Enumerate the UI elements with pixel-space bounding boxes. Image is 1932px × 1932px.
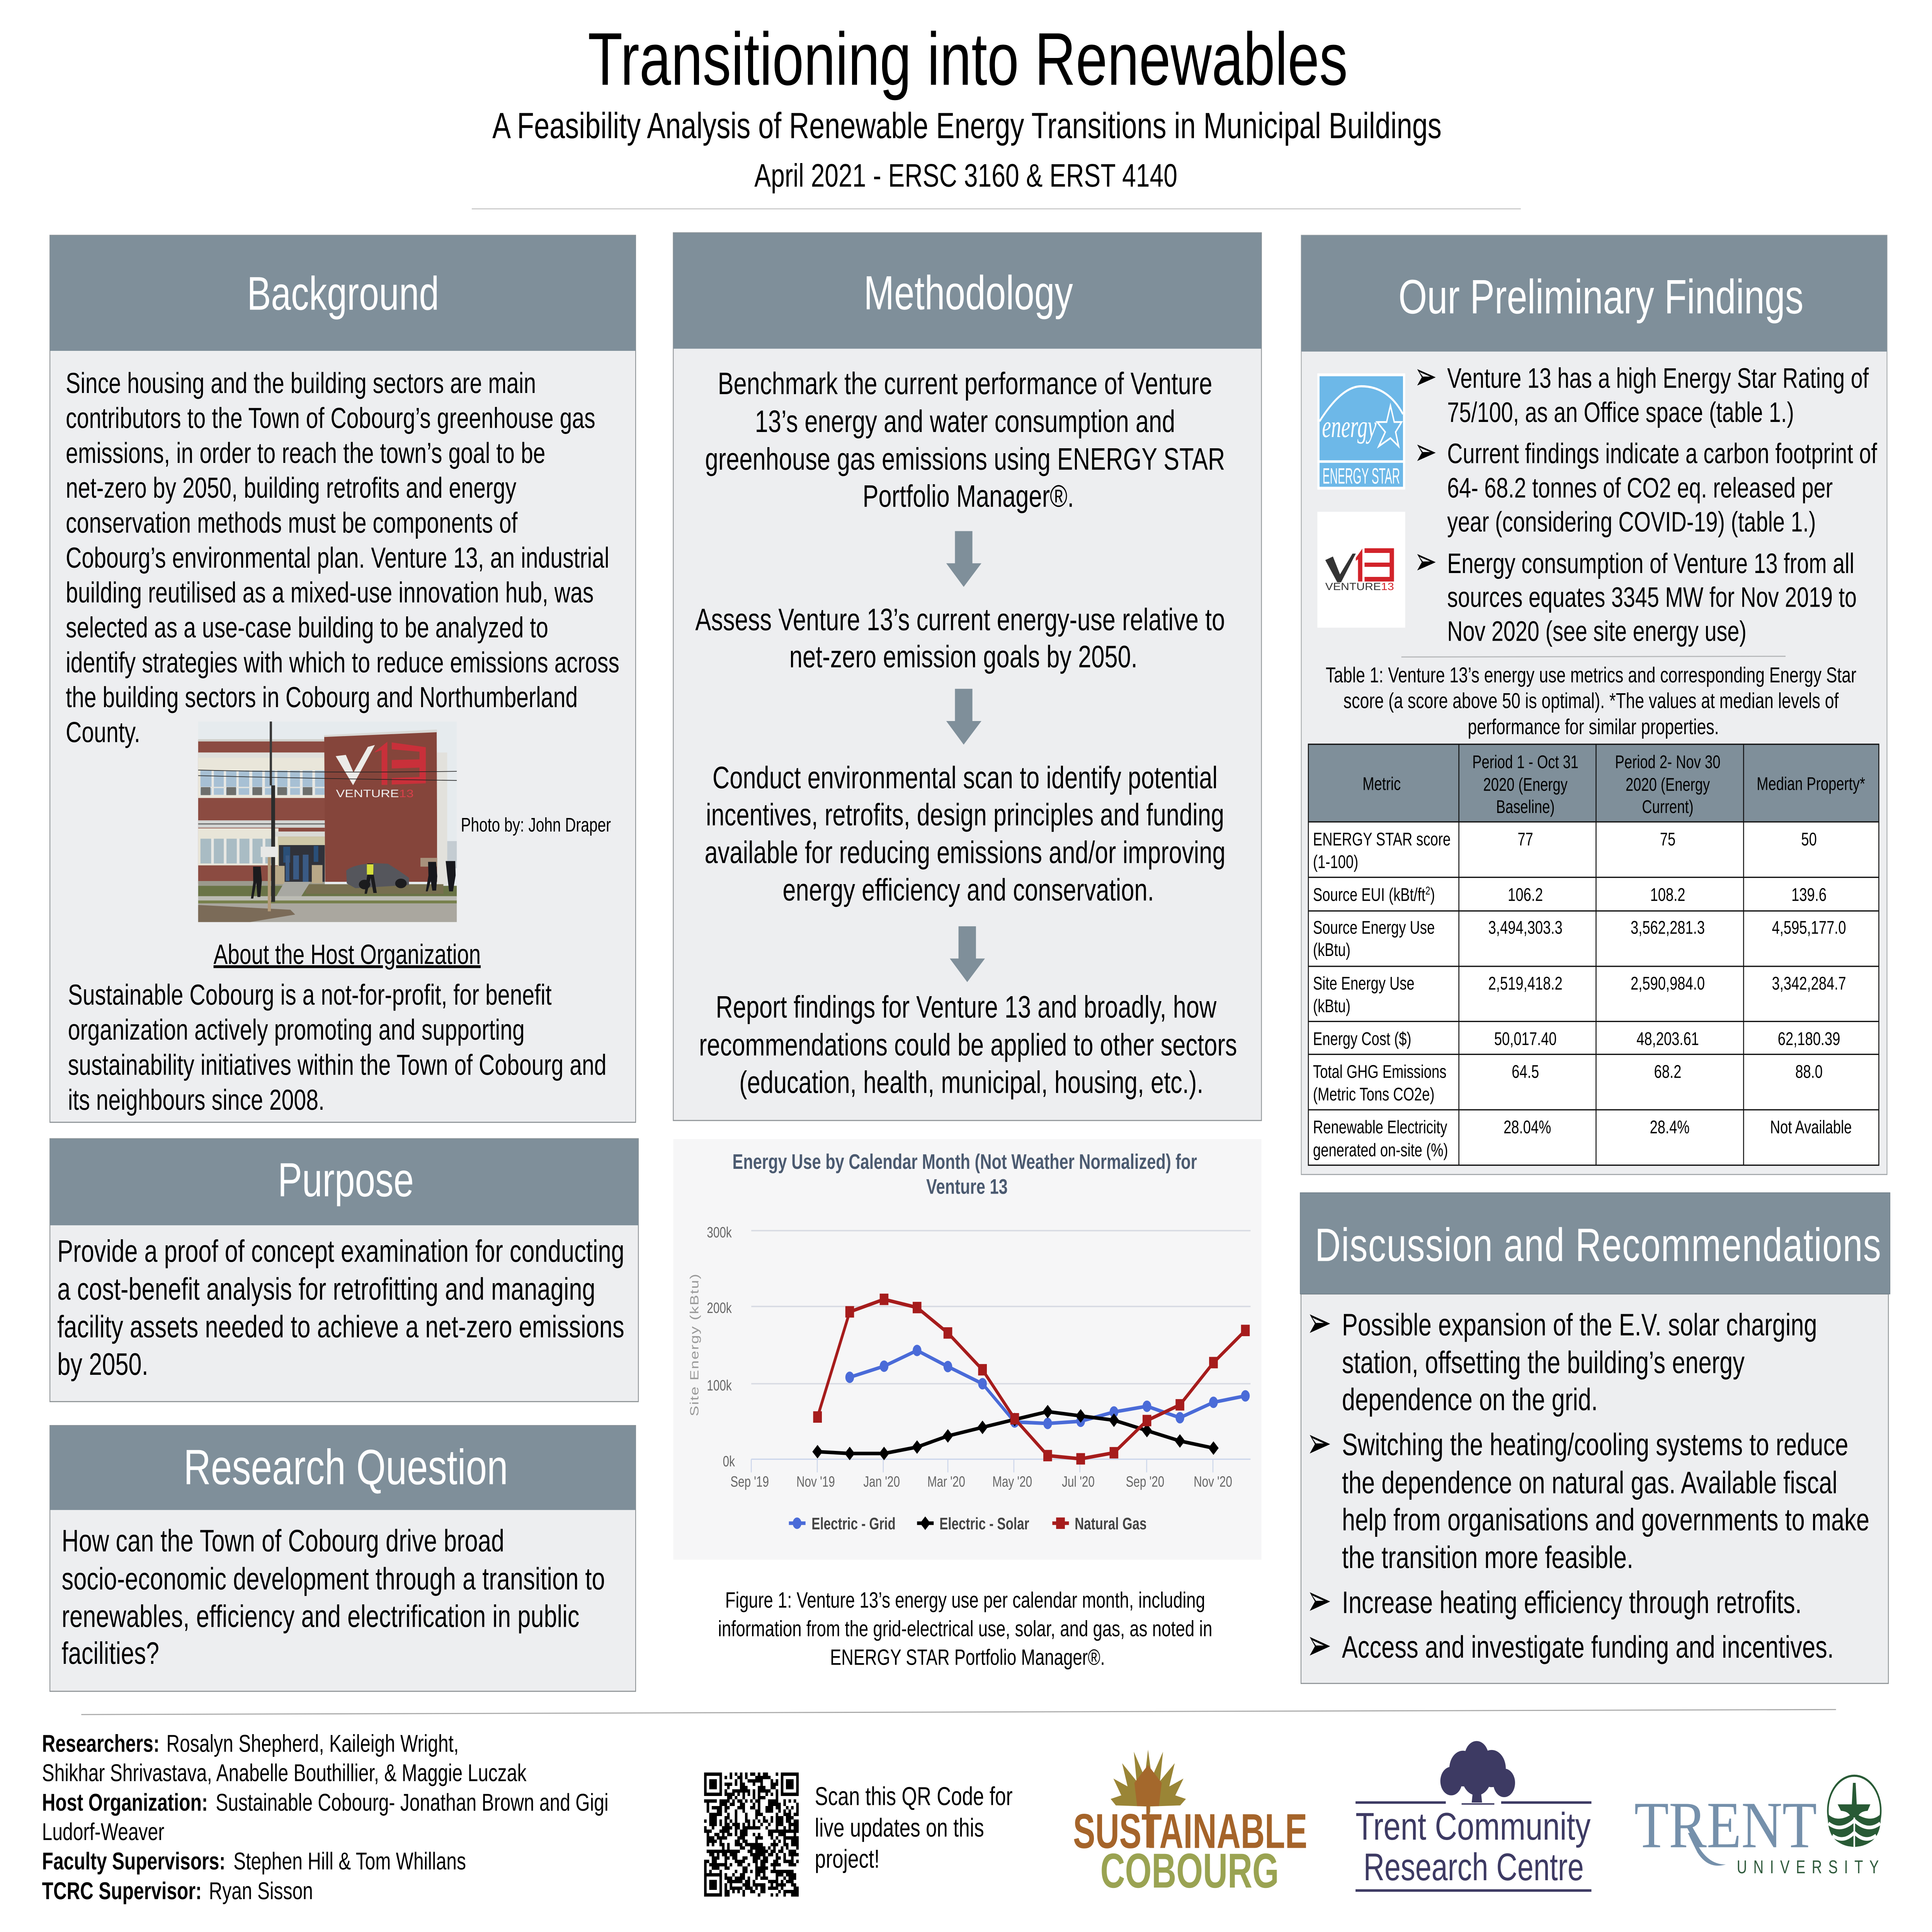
icon: bullet arrow 2 [1417,444,1436,461]
recommendation 1: Possible expansion of the E.V. solar charging [1342,1308,1817,1342]
arrow: step 3 to 4 [950,926,985,982]
chart legend: Electric - Grid [811,1514,896,1533]
recommendation 4: Access and investigate funding and incentives. [1342,1630,1834,1665]
host organization text: Sustainable Cobourg is a not-for-profit, for benefit [68,979,552,1011]
y axis title: Site Energy (kBtu) [688,1274,701,1416]
panel: our preliminary findings [1301,235,1887,1175]
table column: period 1: 2,519,418.2 [1488,973,1563,993]
R tail [1688,1833,1726,1866]
step 2 text: net-zero emission goals by 2050. [789,639,1138,674]
icon: bullet arrow [1310,1592,1330,1611]
background text: County. [66,716,140,748]
figure caption: ENERGY STAR Portfolio Manager®. [830,1645,1105,1670]
figure caption: Figure 1: Venture 13’s energy use per calendar month, including [725,1588,1205,1612]
icon: bullet arrow 1 [1417,369,1436,386]
background text: net-zero by 2050, building retrofits and energy [66,472,517,504]
table metric names: ENERGY STAR score [1313,829,1451,849]
QR call to action: Scan this QR Code for [815,1782,1013,1811]
logo: Trent Community Research Centre [1355,1741,1592,1891]
background text: Cobourg’s environmental plan. Venture 13, an industrial [66,542,609,574]
finding 1: Venture 13 has a high Energy Star Rating of [1447,362,1869,394]
recommendation 2: Switching the heating/cooling systems to reduce [1342,1427,1848,1462]
chart legend [789,1514,1146,1533]
step 3 text: incentives, retrofits, design principles and funding [706,798,1224,832]
step 4 text: recommendations could be applied to other sectors [699,1027,1237,1062]
footer: credits: Ryan Sisson [209,1877,313,1905]
icon: bullet arrow [1310,1637,1330,1656]
table header row: Period 2- Nov 30 [1615,752,1720,772]
finding 2: Current findings indicate a carbon footprint of [1447,437,1878,469]
QR call to action: live updates on this [815,1813,984,1842]
step 3 text: energy efficiency and conservation. [782,872,1154,907]
host organization text: its neighbours since 2008. [68,1084,325,1116]
footer: credits: Rosalyn Shepherd, Kaileigh Wright, [166,1730,459,1757]
icon: venture 13 logo [1317,512,1405,628]
footer: credits: Sustainable Cobourg- Jonathan Brown and Gigi [216,1789,609,1816]
x axis labels: Nov '19 [796,1473,835,1490]
footer: credits: Ludorf-Weaver [42,1818,164,1845]
footer: credits: Host Organization: [42,1789,208,1816]
step 3 text: Conduct environmental scan to identify potential [713,760,1218,795]
footer: credits: Shikhar Shrivastava, Anabelle Bouthillier, & Maggie Luczak [42,1759,527,1786]
icon: energy star logo: ENERGY STAR [1323,464,1400,488]
table column: median property: Not Available [1770,1117,1852,1137]
logo: Trent University [1634,1776,1881,1878]
photo credit: Photo by: John Draper [461,814,611,836]
table column: period 1: 3,494,303.3 [1488,917,1563,938]
icon: bullet arrow 3 [1417,554,1436,570]
series: electric grid [850,1350,1245,1423]
heading: findings: Our Preliminary Findings [1398,270,1803,324]
table metric names: Source EUI (kBt/ft [1313,884,1425,905]
subtitle: A Feasibility Analysis of Renewable Energy Transitions in Municipal Buildings [492,105,1442,146]
heading: methodology: Methodology [864,267,1073,320]
QR code [704,1772,799,1896]
logo: Trent Community Research Centre: Research Centre [1364,1845,1584,1888]
table column: period 1: 106.2 [1508,884,1543,905]
step 2 text: Assess Venture 13’s current energy-use relative to [695,602,1225,637]
recommendation 2: help from organisations and governments to make [1342,1502,1869,1537]
table metric names: generated on-site (%) [1313,1139,1448,1160]
x axis labels: Mar '20 [927,1473,965,1490]
purpose text: a cost-benefit analysis for retrofitting and managing [57,1272,595,1306]
table header row: Baseline) [1496,796,1554,817]
logo: Sustainable Cobourg [1073,1750,1307,1898]
finding 3: sources equates 3345 MW for Nov 2019 to [1447,581,1857,613]
table header row: Period 1 - Oct 31 [1472,752,1578,772]
table column: period 1: 64.5 [1512,1061,1539,1082]
emblem [1828,1776,1881,1847]
x axis labels: Sep '20 [1126,1473,1164,1490]
x axis labels: Sep '19 [730,1473,769,1490]
panel: purpose [50,1139,638,1401]
y axis labels: 0k [723,1453,735,1469]
y axis labels: 200k [707,1299,732,1316]
background text: Since housing and the building sectors are main [66,367,536,400]
leaf emblem [1111,1750,1186,1813]
finding 2: 64- 68.2 tonnes of CO2 eq. released per [1447,472,1833,503]
table header row: 2020 (Energy [1626,774,1710,795]
panel: background [50,235,636,1122]
recommendation 2: the dependence on natural gas. Available fiscal [1342,1465,1837,1500]
footer: credits: Researchers: [42,1730,160,1757]
chart legend: Electric - Solar [939,1514,1029,1533]
recommendation 2: the transition more feasible. [1342,1540,1633,1575]
table column: period 2: 48,203.61 [1636,1028,1699,1049]
table column: period 2: 68.2 [1654,1061,1681,1082]
heading: purpose: Purpose [278,1153,414,1207]
footer: credits: Faculty Supervisors: [42,1848,225,1875]
table column: median property: 62,180.39 [1778,1028,1840,1049]
x axis labels: Nov '20 [1194,1473,1232,1490]
table metric names: Site Energy Use [1313,973,1415,993]
y axis labels: 100k [707,1377,732,1394]
x axis labels: Jan '20 [863,1473,900,1490]
tree [1440,1741,1515,1804]
table column: median property: 3,342,284.7 [1772,973,1846,993]
step 1 text: greenhouse gas emissions using ENERGY STAR [705,442,1225,476]
panel: research question [50,1425,636,1691]
recommendation 3: Increase heating efficiency through retrofits. [1342,1585,1802,1620]
recommendation 1: dependence on the grid. [1342,1382,1598,1417]
table caption: Table 1: Venture 13’s energy use metrics and corresponding Energy Star [1326,663,1856,687]
background text: emissions, in order to reach the town’s goal to be [66,437,545,469]
table metric names: ) [1430,884,1435,905]
step 3 text: available for reducing emissions and/or improving [704,835,1225,870]
research question text: renewables, efficiency and electrification in public [61,1599,580,1634]
table metric names: (kBtu) [1313,939,1350,960]
recommendation 1: station, offsetting the building’s energy [1342,1345,1745,1380]
wordmark: university: UNIVERSITY [1737,1857,1879,1878]
subheading: about the host organization: About the Host Organization [214,939,481,970]
background text: selected as a use-case building to be analyzed to [66,612,548,644]
table header row: Metric [1362,773,1401,794]
step 1 text: Benchmark the current performance of Venture [718,366,1212,401]
background text: identify strategies with which to reduce emissions across [66,646,619,679]
table column: period 2: 3,562,281.3 [1631,917,1705,938]
table metric names: Renewable Electricity [1313,1117,1447,1137]
background text: the building sectors in Cobourg and Northumberland [66,682,578,714]
step 4 text: Report findings for Venture 13 and broadly, how [716,990,1217,1024]
series: natural gas [813,1294,1250,1464]
footer: credits: TCRC Supervisor: [42,1877,202,1905]
icon: energy star logo: energy [1322,410,1377,444]
research question text: socio-economic development through a transition to [61,1561,605,1596]
step 4 text: (education, health, municipal, housing, etc.). [739,1065,1203,1100]
heading: background: Background [247,267,439,320]
purpose text: by 2050. [57,1347,148,1382]
title: Transitioning into Renewables [588,17,1348,101]
table header row: Median Property* [1757,773,1865,794]
research question text: facilities? [61,1636,159,1670]
icon: energy star logo [1317,373,1405,490]
wordmark: sustainable: SUSTAINABLE [1073,1804,1307,1859]
icon: bullet arrow [1310,1435,1330,1454]
series: electric solar [812,1405,1219,1460]
host organization text: sustainability initiatives within the Town of Cobourg and [68,1049,607,1081]
host organization text: organization actively promoting and supporting [68,1014,525,1046]
step 1 text: Portfolio Manager®. [863,479,1074,514]
wordmark: Trent Community [1355,1804,1590,1848]
arrow: step 1 to 2 [946,531,981,587]
table caption: score (a score above 50 is optimal). *The values at median levels of [1344,689,1838,713]
table header row: Current) [1642,796,1694,817]
table metric names: (Metric Tons CO2e) [1313,1084,1434,1104]
table column: median property: 88.0 [1795,1061,1823,1082]
finding 3: Nov 2020 (see site energy use) [1447,615,1747,647]
table column: period 1: 50,017.40 [1494,1028,1557,1049]
table column: period 1: 77 [1517,829,1533,849]
chart title: Venture 13 [926,1175,1008,1199]
table metric names: (kBtu) [1313,995,1350,1016]
table column: period 2: 28.4% [1650,1117,1690,1137]
purpose text: Provide a proof of concept examination for conducting [57,1234,624,1269]
figure caption: information from the grid-electrical use, solar, and gas, as noted in [718,1617,1212,1641]
x axis labels: Jul '20 [1062,1473,1095,1490]
icon: bullet arrow [1310,1315,1330,1333]
date and course line: April 2021 - ERSC 3160 & ERST 4140 [754,158,1177,194]
photo sign wordmark: VENTURE 13 [336,788,414,800]
finding 2: year (considering COVID-19) (table 1.) [1447,506,1816,537]
purpose text: facility assets needed to achieve a net-zero emissions [57,1310,624,1344]
wordmark: cobourg: COBOURG [1100,1844,1279,1898]
y axis labels: 300k [707,1224,732,1241]
panel: methodology [673,233,1262,1121]
table column: median property: 4,595,177.0 [1772,917,1846,938]
footer: credits: Stephen Hill & Tom Whillans [233,1848,466,1875]
table metric names: Source Energy Use [1313,917,1435,938]
table column: period 2: 75 [1660,829,1675,849]
table caption: performance for similar properties. [1468,714,1719,739]
photo: Venture 13 building [198,721,457,922]
chart title: Energy Use by Calendar Month (Not Weather Normalized) for [733,1150,1197,1173]
table 1: energy metrics [1308,744,1879,1165]
arrow: step 2 to 3 [946,689,981,745]
panel: energy use line chart [673,1139,1262,1560]
wordmark: trent: TRENT [1634,1789,1817,1862]
table header row: 2020 (Energy [1483,774,1568,795]
table metric names: Energy Cost ($) [1313,1028,1412,1049]
heading: discussion: Discussion and Recommendations [1315,1218,1881,1271]
icon: venture 13 logo: VENTURE 13 [1325,581,1394,593]
table column: period 2: 2,590,984.0 [1631,973,1705,993]
table column: period 1: 28.04% [1503,1117,1551,1137]
step 1 text: 13’s energy and water consumption and [755,404,1175,439]
x axis labels: May '20 [992,1473,1032,1490]
table column: median property: 50 [1801,829,1817,849]
research question text: How can the Town of Cobourg drive broad [61,1524,504,1558]
finding 3: Energy consumption of Venture 13 from all [1447,547,1854,579]
QR call to action: project! [815,1844,879,1873]
table metric names: Total GHG Emissions [1313,1061,1446,1082]
table column: period 2: 108.2 [1650,884,1685,905]
chart legend: Natural Gas [1075,1514,1146,1533]
table metric names: (1-100) [1313,851,1358,872]
table metric names: 2 [1425,884,1430,897]
background text: building reutilised as a mixed-use innovation hub, was [66,577,594,609]
heading: research question: Research Question [184,1439,508,1495]
background text: conservation methods must be components of [66,507,518,539]
panel: discussion and recommendations [1300,1193,1890,1684]
finding 1: 75/100, as an Office space (table 1.) [1447,396,1794,428]
table column: median property: 139.6 [1791,884,1827,905]
background text: contributors to the Town of Cobourg’s greenhouse gas [66,402,595,434]
title block [492,17,1442,194]
